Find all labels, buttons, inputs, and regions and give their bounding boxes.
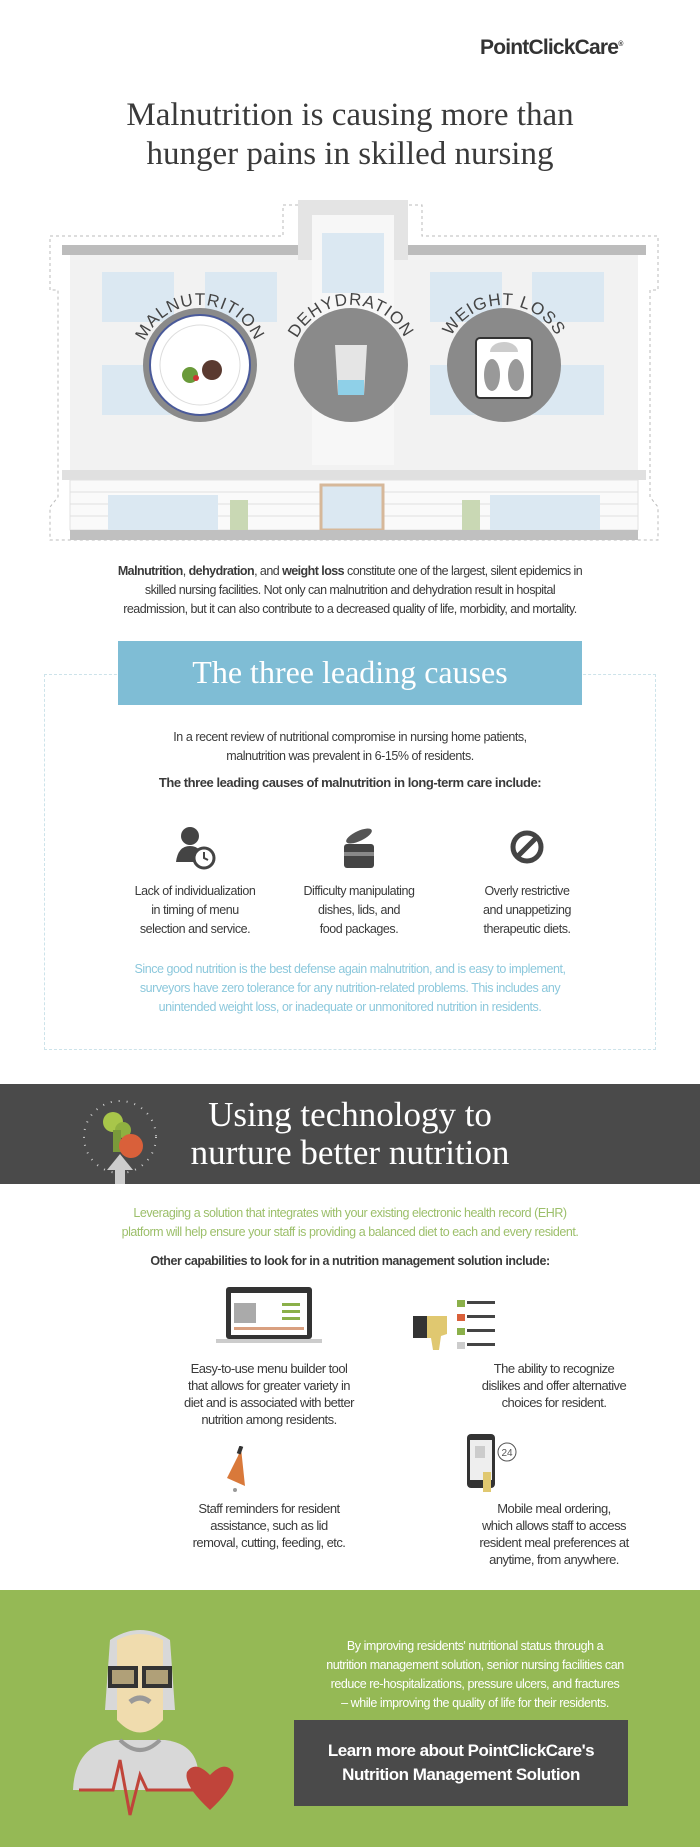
cause 2: [303, 828, 414, 936]
intro paragraph: Malnutrition, dehydration, and weight loss constitute one of the largest, silent epidemics in: [118, 564, 582, 578]
text: dislikes: dislikes and offer alternative: [482, 1378, 626, 1393]
button: learn more: [294, 1720, 628, 1806]
icon: thumbs down list: [413, 1300, 495, 1350]
blue note: surveyors have zero tolerance for any nutrition-related problems. This includes any: [140, 981, 560, 995]
heading banner: The three leading causes: [118, 641, 582, 705]
logo: PointClickCare®: [480, 36, 623, 59]
icon: phone 24: [467, 1434, 516, 1492]
text: mobile ordering: Mobile meal ordering,: [497, 1501, 611, 1516]
text: menu builder: Easy-to-use menu builder tool: [191, 1361, 347, 1376]
icon: weight loss scale: WEIGHT LOSS: [442, 293, 564, 334]
cause 3: [483, 830, 571, 936]
text: staff reminders: Staff reminders for resident: [198, 1501, 340, 1516]
text: mobile ordering: resident meal preferences at: [479, 1535, 629, 1550]
closing text: nutrition management solution, senior nursing facilities can: [326, 1658, 624, 1672]
text: mobile ordering: which allows staff to access: [482, 1518, 626, 1533]
title: Malnutrition is causing more than: [126, 97, 574, 133]
text: menu builder: that allows for greater variety in: [188, 1378, 350, 1393]
cause 3: Overly restrictive: [485, 884, 569, 898]
icon: phone 24: 24: [501, 1448, 513, 1459]
heading: Using technology: Using technology to: [208, 1095, 492, 1134]
text: prevalence: malnutrition was prevalent in 6-15% of residents.: [226, 749, 474, 763]
text: staff reminders: [193, 1501, 345, 1550]
cause 2: Difficulty manipulating: [303, 884, 414, 898]
cause 2: dishes, lids, and: [318, 903, 400, 917]
closing text: [326, 1639, 624, 1710]
icon: vegetables with arrow: [83, 1100, 157, 1184]
green intro text: Leveraging a solution that integrates with your existing electronic health record (EHR): [133, 1206, 567, 1220]
green intro text: [122, 1206, 578, 1239]
cause 3: therapeutic diets.: [483, 922, 571, 936]
icon: prohibited: [510, 830, 544, 864]
icon: bell: [227, 1446, 245, 1492]
text: staff reminders: assistance, such as lid: [210, 1518, 328, 1533]
dark band: technology heading: [0, 1084, 700, 1184]
text: mobile ordering: [479, 1501, 630, 1567]
capabilities heading: Other capabilities to look for in a nutrition management solution include:: [150, 1254, 550, 1268]
button: learn more: Learn more about PointClickCare's: [328, 1741, 594, 1760]
cause 1: Lack of individualization: [135, 884, 255, 898]
text: menu builder: nutrition among residents.: [201, 1412, 337, 1427]
icon: elderly man with heartbeat: [73, 1630, 234, 1816]
heading: Using technology: nurture better nutrition: [191, 1133, 509, 1172]
green footer panel: [0, 1590, 700, 1847]
intro paragraph: readmission, but it can also contribute to a decreased quality of life, morbidity, and mortality.: [123, 602, 577, 616]
cause 1: in timing of menu: [151, 903, 239, 917]
intro paragraph: skilled nursing facilities. Not only can malnutrition and dehydration result in hospital: [145, 583, 555, 597]
icon: person with clock: [176, 827, 216, 870]
blue note: Since good nutrition is the best defense again malnutrition, and is easy to implement,: [134, 962, 566, 976]
green intro text: platform will help ensure your staff is providing a balanced diet to each and every resident.: [122, 1225, 578, 1239]
text: menu builder: [184, 1361, 354, 1427]
cause 1: [135, 827, 255, 936]
cause 2: food packages.: [320, 922, 398, 936]
blue note: unintended weight loss, or inadequate or unmonitored nutrition in residents.: [159, 1000, 541, 1014]
icon: malnutrition plate: [135, 293, 264, 422]
building illustration: [50, 200, 658, 540]
closing text: reduce re-hospitalizations, pressure ulcers, and fractures: [331, 1677, 619, 1691]
heading banner: The three leading causes: The three leading causes: [192, 654, 508, 690]
icon: malnutrition plate: MALNUTRITION: [135, 293, 264, 340]
icon: dehydration glass: [288, 293, 414, 422]
text: dislikes: The ability to recognize: [494, 1361, 614, 1376]
intro paragraph: [118, 564, 582, 616]
icon: weight loss scale: [442, 293, 564, 422]
button: learn more: Nutrition Management Solution: [342, 1765, 580, 1784]
text: causes heading: The three leading causes of malnutrition in long-term care include:: [159, 775, 541, 790]
cause 1: selection and service.: [140, 922, 250, 936]
text: prevalence: [173, 730, 527, 763]
text: mobile ordering: anytime, from anywhere.: [489, 1552, 619, 1567]
icon: laptop: [216, 1287, 322, 1343]
closing text: By improving residents' nutritional status through a: [347, 1639, 603, 1653]
text: staff reminders: removal, cutting, feeding, etc.: [193, 1535, 345, 1550]
heading: Using technology: [191, 1095, 509, 1172]
panel: three leading causes: [44, 674, 656, 1050]
cause 3: and unappetizing: [483, 903, 571, 917]
text: prevalence: In a recent review of nutritional compromise in nursing home patients,: [173, 730, 527, 744]
blue note: [134, 962, 566, 1014]
title: [126, 97, 574, 172]
text: dislikes: [482, 1361, 626, 1410]
icon: dehydration glass: DEHYDRATION: [288, 293, 414, 338]
icon: can: [344, 828, 374, 868]
text: menu builder: diet and is associated with better: [184, 1395, 354, 1410]
closing text: – while improving the quality of life for their residents.: [341, 1696, 609, 1710]
text: dislikes: choices for resident.: [502, 1395, 606, 1410]
title: hunger pains in skilled nursing: [147, 136, 553, 172]
